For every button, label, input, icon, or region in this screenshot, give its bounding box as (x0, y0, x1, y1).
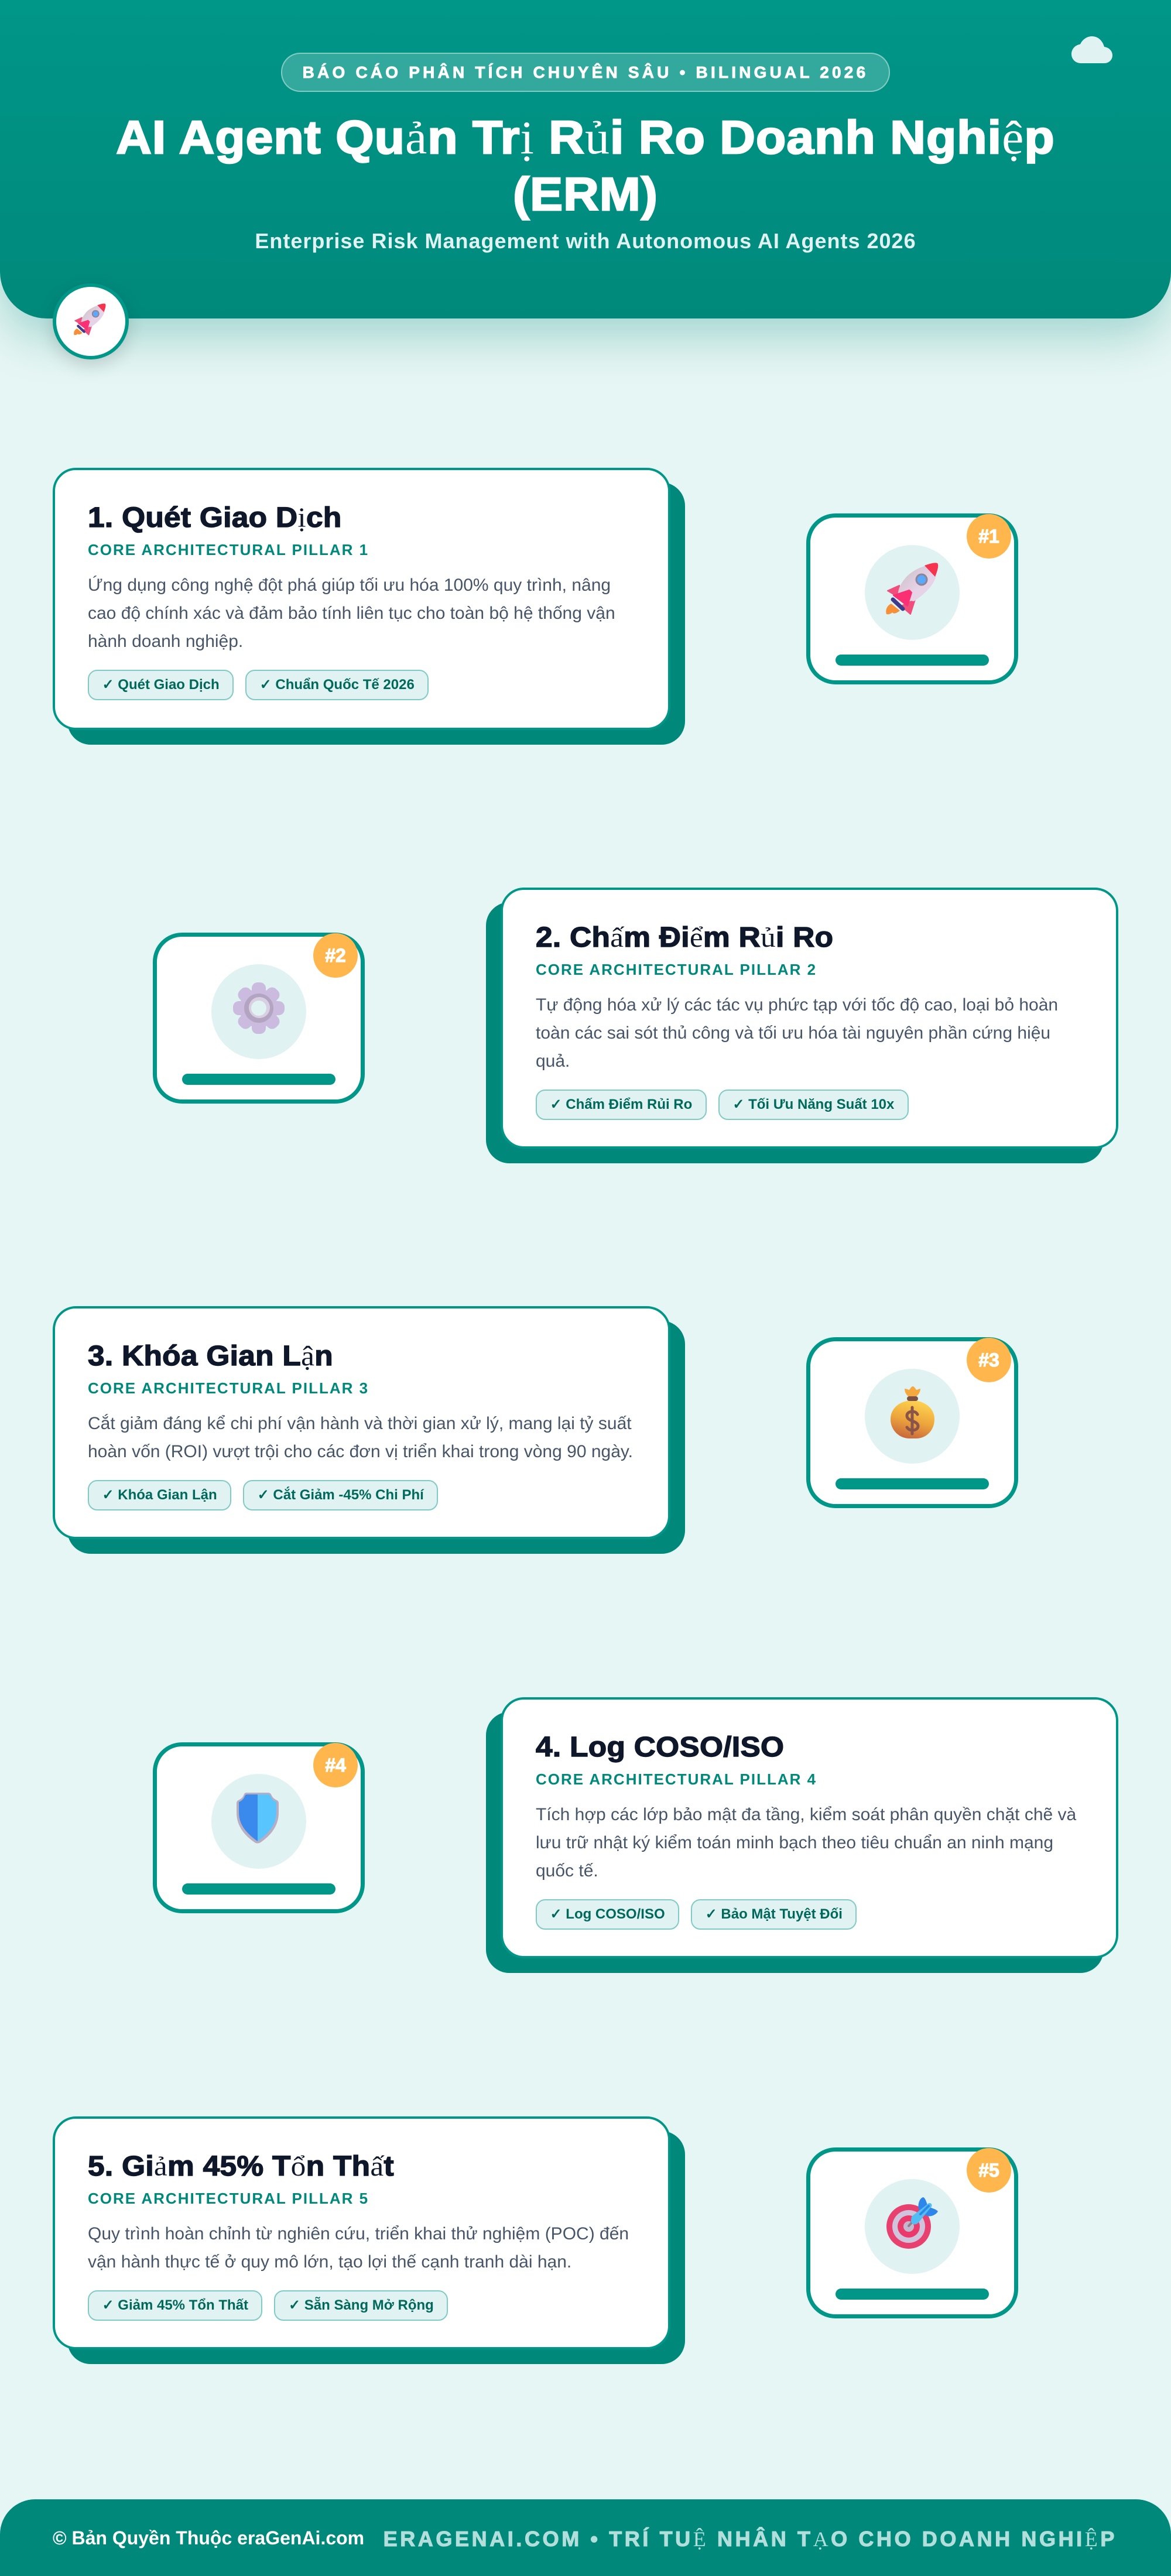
step 1 description (88, 576, 615, 651)
step 5 tags (88, 2290, 448, 2321)
number badge (967, 1338, 1011, 1382)
panel: step 5 text card (53, 2116, 670, 2349)
header badge pill: BÁO CÁO PHÂN TÍCH CHUYÊN SÂU • BILINGUAL 2026 (303, 63, 868, 81)
number badge: #4 (325, 1755, 346, 1776)
icon: rocket (74, 303, 105, 335)
step 3 tags: ✓ Cắt Giảm -45% Chi Phí (258, 1487, 424, 1503)
step 4 description (536, 1805, 1076, 1880)
step 1 label: CORE ARCHITECTURAL PILLAR 1 (88, 541, 369, 559)
step 2 tags: ✓ Chấm Điểm Rủi Ro (550, 1097, 692, 1112)
title (116, 111, 1055, 221)
panel: step 5 illustration (806, 2147, 1018, 2318)
step 1 description: cao độ chính xác và đảm bảo tính liên tục cho toàn bộ hệ thống vận (88, 604, 615, 623)
number badge: #3 (978, 1349, 999, 1371)
step 1 description: hành doanh nghiệp. (88, 632, 243, 651)
step 1 tags (88, 670, 429, 700)
step 4 heading: 4. Log COSO/ISO (536, 1732, 784, 1763)
footer band (0, 2499, 1171, 2576)
number badge (967, 514, 1011, 559)
copyright text: © Bản Quyền Thuộc eraGenAi.com (53, 2527, 364, 2548)
progress bar (182, 1883, 335, 1895)
progress bar (836, 2289, 989, 2300)
step 3 label: CORE ARCHITECTURAL PILLAR 3 (88, 1379, 369, 1397)
icon: shield (237, 1793, 279, 1843)
step 5 label: CORE ARCHITECTURAL PILLAR 5 (88, 2190, 369, 2207)
step 1 description: Ứng dụng công nghệ đột phá giúp tối ưu hóa 100% quy trình, nâng (88, 576, 611, 595)
panel: step 1 text card (53, 468, 670, 730)
step 3 tags: ✓ Khóa Gian Lận (102, 1487, 217, 1503)
step 2 description: toàn các sai sót thủ công và tối ưu hóa tài nguyên phần cứng hiệu (536, 1023, 1050, 1043)
step 1 heading: 1. Quét Giao Dịch (88, 502, 342, 533)
number badge (313, 933, 358, 978)
number badge: #2 (325, 945, 346, 966)
step 5 tags: ✓ Sẵn Sàng Mở Rộng (289, 2297, 434, 2313)
title: AI Agent Quản Trị Rủi Ro Doanh Nghiệp (116, 111, 1055, 164)
header rocket medallion (53, 283, 129, 359)
progress bar (836, 655, 989, 666)
step 3 description (88, 1414, 633, 1461)
icon: gear (233, 982, 285, 1034)
icon: money bag (891, 1386, 934, 1438)
step 2 description: Tự động hóa xử lý các tác vụ phức tạp với tốc độ cao, loại bỏ hoàn (536, 995, 1058, 1015)
panel: step 2 illustration (153, 933, 365, 1104)
step 2 heading: 2. Chấm Điểm Rủi Ro (536, 922, 833, 953)
step 4 tags: ✓ Log COSO/ISO (550, 1906, 665, 1922)
step 5 tags: ✓ Giảm 45% Tổn Thất (102, 2297, 248, 2313)
progress bar (836, 1478, 989, 1489)
icon: cloud (1071, 36, 1112, 63)
title: (ERM) (513, 168, 658, 220)
number badge: #1 (978, 526, 999, 547)
step 4 tags: ✓ Bảo Mật Tuyệt Đối (706, 1906, 843, 1922)
icon: target with dart (886, 2197, 938, 2249)
step 2 tags (536, 1090, 909, 1120)
step 2 label: CORE ARCHITECTURAL PILLAR 2 (536, 961, 817, 978)
step 5 description: vận hành thực tế ở quy mô lớn, tạo lợi thế cạnh tranh dài hạn. (88, 2252, 571, 2272)
step 1 tags: ✓ Quét Giao Dịch (102, 677, 220, 693)
progress bar (182, 1074, 335, 1085)
step 2 description (536, 995, 1058, 1071)
number badge (313, 1743, 358, 1787)
header badge pill (281, 53, 890, 92)
step 3 tags (88, 1480, 438, 1510)
footer tagline: ERAGENAI.COM • TRÍ TUỆ NHÂN TẠO CHO DOANH NGHIỆP (384, 2527, 1117, 2551)
step 5 description: Quy trình hoàn chỉnh từ nghiên cứu, triển khai thử nghiệm (POC) đến (88, 2224, 629, 2243)
panel: step 4 text card (501, 1697, 1118, 1958)
step 2 description: quả. (536, 1051, 570, 1071)
step 3 description: hoàn vốn (ROI) vượt trội cho các đơn vị triển khai trong vòng 90 ngày. (88, 1442, 633, 1461)
subtitle: Enterprise Risk Management with Autonomous AI Agents 2026 (255, 229, 916, 253)
step 3 heading: 3. Khóa Gian Lận (88, 1341, 333, 1372)
number badge (967, 2148, 1011, 2193)
panel: step 3 text card (53, 1306, 670, 1539)
step 4 tags (536, 1899, 857, 1930)
step 1 tags: ✓ Chuẩn Quốc Tế 2026 (260, 677, 415, 693)
step 4 description: lưu trữ nhật ký kiểm toán minh bạch theo tiêu chuẩn an ninh mạng (536, 1833, 1053, 1852)
step 4 label: CORE ARCHITECTURAL PILLAR 4 (536, 1770, 817, 1788)
icon: rocket (886, 563, 938, 615)
step 4 description: Tích hợp các lớp bảo mật đa tầng, kiểm soát phân quyền chặt chẽ và (536, 1805, 1076, 1824)
panel: step 4 illustration (153, 1742, 365, 1913)
step 5 description (88, 2224, 629, 2272)
header band (0, 0, 1171, 318)
step 2 tags: ✓ Tối Ưu Năng Suất 10x (732, 1097, 894, 1112)
panel: step 3 illustration (806, 1337, 1018, 1508)
step 3 description: Cắt giảm đáng kể chi phí vận hành và thời gian xử lý, mang lại tỷ suất (88, 1414, 632, 1433)
panel: step 2 text card (501, 888, 1118, 1149)
number badge: #5 (978, 2160, 999, 2181)
step 4 description: quốc tế. (536, 1861, 598, 1880)
step 5 heading: 5. Giảm 45% Tổn Thất (88, 2151, 394, 2182)
panel: step 1 illustration (806, 513, 1018, 684)
